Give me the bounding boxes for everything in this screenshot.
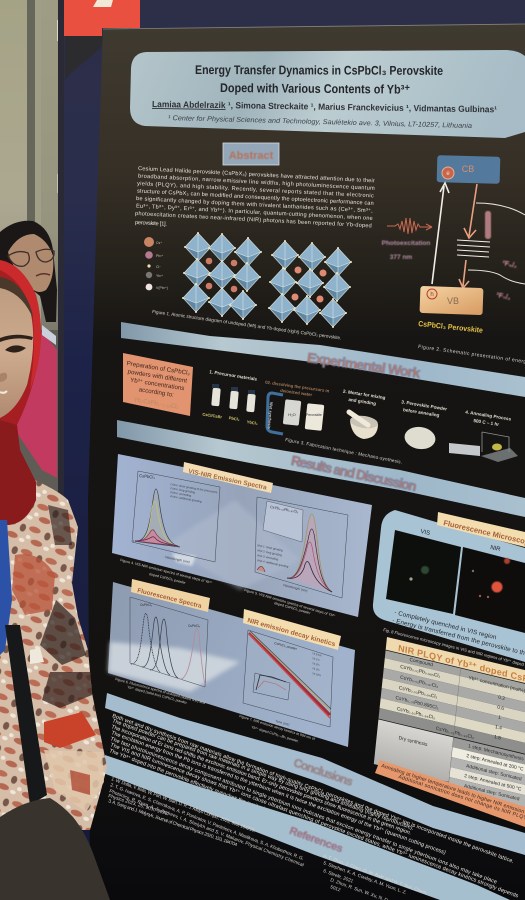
poster title — [195, 63, 443, 97]
preparation box: Preparation of CsPbCl₃ — [126, 360, 191, 377]
hair — [0, 221, 57, 322]
figure 8 caption: Fig. 8 Fluorescence microscopy images in VIS and NIR regions of Yb³⁺ doped — [383, 627, 525, 667]
collar — [42, 325, 56, 345]
references left: Photonics, R. Ryan, A. A. Andreev, I. A. Shelykh and S. V. Makarov, Physical Chemistry Chemical — [109, 788, 305, 867]
step: dissolving: Perovskite — [306, 413, 322, 417]
label: fluorescence spectra: Fluorescence Spectra — [137, 587, 203, 610]
figure 1 caption: Figure 1. Atomic structure diagram of undoped (left) and Yb-doped (right) CsPbCl₃ perovskite. — [152, 309, 342, 341]
table rows: CsYb₀.₁₀Pb₀.₈₅Cl₃ — [396, 706, 435, 721]
step 1: precursor materials: CsCl/CsBr — [202, 412, 223, 420]
label: NIR decay kinetics — [243, 609, 341, 650]
figure 7 caption: Figure 7. NIR emission decay kinetics at 984 nm of — [239, 714, 315, 741]
crystal legend: Yb³⁺ — [156, 274, 163, 278]
glasses — [8, 249, 54, 266]
step 4: annealing — [449, 409, 518, 462]
blouse print areas — [12, 505, 104, 812]
chart: figure 6: CsPbCl₃ — [188, 624, 201, 628]
lanyard — [0, 520, 12, 655]
chart: figure 4: 4 time: additional grinding — [170, 494, 202, 504]
panel: fluorescence microscopy: NIR — [490, 545, 502, 553]
step: dissolving — [265, 380, 330, 434]
references right: 6. Steele, 2021 — [323, 868, 354, 884]
crystal legend: Cl⁻ — [156, 265, 161, 269]
person in the background — [0, 221, 57, 478]
step 3: powder: before annealing — [403, 407, 440, 418]
step 1: precursor materials: YbCl₃ — [246, 419, 258, 426]
preparation box: according to: — [138, 386, 175, 399]
step 2: mortar: and grinding — [348, 397, 377, 406]
panel: fluorescence and decay — [108, 579, 355, 747]
micrograph: NIR — [455, 547, 525, 633]
step 4: annealing: 500 C – 1 hr — [473, 418, 500, 427]
crystal structure Yb-doped — [268, 240, 352, 328]
section banner: experimental work — [121, 322, 525, 397]
VB box: VB — [447, 296, 459, 306]
preparation box: powders with different — [127, 368, 188, 385]
preparation box: Yb₂CsPb₁₋₁.₅ₓCl₃ — [133, 397, 180, 411]
section banner: conclusions — [105, 693, 525, 855]
title banner — [130, 50, 525, 138]
chart: figure 4: Wavelength (nm) — [165, 555, 190, 564]
chart: figure 7: CsPbCl₃ powder — [274, 641, 298, 651]
nose — [0, 373, 7, 382]
chart: figure 5: step 4: additional grinding — [257, 558, 289, 569]
crystal legend: Pb²⁺ — [156, 254, 163, 258]
table rows: 1.8 — [494, 734, 501, 742]
figure 5 caption: doped CsPbCl₃ powder — [274, 601, 312, 615]
poster title: Energy Transfer Dynamics in CsPbCl₃ Perovskite — [195, 63, 443, 78]
figure 3 caption: Figure 3. Fabrication technique : Mechano-synthesis. — [285, 437, 403, 465]
figure 6 caption: Figure 6. Fluorescence spectra of undoped (dotted line) and — [115, 677, 206, 705]
conclusions text: The incorporation of Er ions red-shifts the excitonic emission band. Er-only perovskite powders show fluorescence in the green region. — [110, 724, 412, 837]
section banner: conclusions: Conclusions — [292, 756, 355, 789]
references right: 5012 — [330, 884, 342, 893]
chart: figure 4: CsPbCl₃ — [139, 473, 156, 480]
conclusions text: The excitation energy from the Pb ions is transferred to the ytterbium when it is twice the excitation energy of the Yb³⁺ (quantum cutting process) — [110, 730, 447, 856]
section banner: experimental work: Experimental Work — [306, 349, 421, 381]
step 4: annealing: 4. Annealing Process — [465, 409, 512, 422]
pink jacket — [12, 332, 57, 478]
table rows: 0.2 — [498, 695, 505, 702]
chart: figure 6: CsPbCl₃ — [140, 603, 153, 607]
abstract text: Cesium Lead Halide perovskite (CsPbX₃) perovskites have attracted attention due to their — [138, 166, 375, 184]
red sign — [64, 0, 140, 36]
abstract text — [135, 166, 375, 229]
CB box: e — [446, 171, 450, 177]
panel: fluorescence microscopy: VIS — [420, 529, 431, 537]
section banner: results and discussion — [117, 420, 525, 517]
chart: figure 4: 2 time: long grinding — [170, 486, 196, 494]
bag — [0, 798, 110, 900]
label: VIS-NIR: VIS-NIR Emission Spectra — [188, 468, 268, 492]
CB box: CB — [462, 164, 474, 174]
abstract text: yields (PLQY), and high stability. Recently, several reports stated that the electronic — [137, 181, 374, 199]
abstract text: structure of CsPbX₃ can be modified and consequently the optoelectronic performance can — [137, 189, 374, 207]
step 1: precursor materials — [202, 369, 258, 426]
crystal legend — [144, 237, 168, 290]
step 2: mortar: 2. Mortar for mixing — [343, 389, 386, 400]
abstract text: Eu³⁺, Tb³⁺, Dy³⁺, Er³⁺, and Yb³⁺). In particular, quantum-cutting phenomenon, when one — [136, 203, 373, 222]
excitation arrow — [432, 183, 449, 284]
energy diagram: ²F₇/₂ — [496, 292, 511, 302]
section banner: results and discussion: Results and Discussion — [290, 453, 418, 494]
chart: figure 7: Yb 3% — [312, 666, 321, 672]
table rows: Yb³⁺ concentration (mol%) — [468, 675, 525, 695]
table rows: 1.4 — [495, 724, 502, 732]
step: dissolving: deionized water — [280, 388, 313, 397]
emission paths — [468, 203, 525, 284]
chart: figure 7: Time (ms) — [275, 719, 290, 727]
chart: figure 5: step 1: short grinding — [257, 543, 284, 553]
micrograph: VIS — [386, 530, 461, 614]
references left: 3. A. Song and J. Melynyk, Journal of Chemical Physics 2020, 153, 184704 — [108, 798, 238, 847]
blouse — [0, 478, 107, 830]
table rows — [388, 655, 525, 803]
figure 7 caption: Yb³⁺ doped CsPb₁₋ₓBrₓ powder. — [251, 725, 299, 743]
references right: 5. Stephen, K. A. Cowley, A. M. Yoon, L. Z. — [323, 860, 408, 895]
bag strap — [5, 625, 47, 805]
chart: figure 7: Yb 0.5% — [312, 651, 323, 658]
label: fluorescence spectra — [131, 579, 210, 612]
figure 4 caption: Figure 4. VIS-NIR emission spectra of several steps of Yb³⁺ — [120, 558, 213, 585]
figure 6 caption: Yb³⁺ doped (solid line) CsPbCl₃ powder. — [127, 685, 188, 705]
photoexcitation wave: Photoexcitation — [382, 240, 430, 247]
chart: figure 5: step 2: long grinding — [257, 548, 283, 557]
microscopy findings: - Energy is transferred from the perovskite to the — [392, 617, 525, 658]
table rows: 1 — [498, 715, 501, 721]
figure 4 caption: doped CsPbCl₃ powder — [149, 572, 187, 585]
chart: figure 4: 3 time: annealing — [170, 490, 192, 498]
conclusions text: The VIS and NIR luminescence decay shows that Yb³⁺ ions cause ultrafast quenching of perovskite excited states, while Yb³⁺ luminescence decay kinetics strongly depends — [109, 742, 519, 900]
crystal structure undoped — [182, 232, 262, 320]
section banner: references: References — [288, 825, 344, 855]
table rows: Dry synthesis — [398, 735, 428, 748]
table: NIR PLQY — [373, 637, 525, 827]
step 2: mortar — [343, 389, 386, 439]
chart: figure 7 — [243, 630, 333, 727]
references left: Physics 2023, 25, 9030-9038. — [108, 793, 169, 816]
face — [8, 234, 53, 292]
step: dissolving: Wet synthesis — [267, 402, 274, 430]
table conclusion band: Additional sonication does not change its NIR PLQY — [397, 774, 525, 822]
references right: 4. T. Zhou, J. Chen, O. M. Bakr and H. T. Sun, Chem. — [323, 853, 428, 896]
energy levels — [457, 240, 490, 257]
scarf highlight — [0, 260, 41, 390]
step: dissolving: H₂O — [288, 412, 296, 417]
table rows: Compound — [409, 657, 434, 668]
chart: figure 5: Wavelength (nm) — [283, 583, 308, 593]
chart: figure 7: Yb 10% — [312, 671, 322, 677]
crystal legend: V(Pb²⁺) — [156, 286, 168, 290]
references left: 1. W. Dutta, V. Bala, W. Pan, W. Bian, D. R. J. Alloys Compd., 2022, 903, 164210. — [111, 776, 256, 833]
chart: figure 5 — [255, 497, 348, 598]
abstract text: photoexcitation creates two near-infrared (NIR) photons has been reported for Yb-doped — [135, 211, 372, 229]
label: VIS-NIR — [183, 462, 273, 493]
VB box: h — [430, 292, 434, 298]
table rows: CsYb₀.₀₃Pb₀.₉₅Cl₃ — [399, 685, 438, 700]
chart: figure 4 — [132, 471, 220, 564]
person in the foreground — [0, 260, 110, 900]
table rows: CsYb₀.₀₇Pb0.895Cl₃ — [395, 695, 439, 711]
authors: Lamiaa Abdelrazik ¹, Simona Streckaite ¹, Marius Franckevicius ¹, Vidmantas Gulbinas¹ — [152, 99, 497, 114]
table conclusion band: Annealing at higher temperature leads to higher NIR emission — [380, 763, 525, 815]
step 3: powder: 3. Perovskite Powder — [401, 399, 448, 412]
chart: figure 7: Yb 1% — [312, 656, 321, 662]
conclusions text: The Yb³⁺ doped into the perovskite effectively quenches the excitonic emission and enables quantum cutting with photoluminescence efficiency of over 100%. — [108, 748, 469, 889]
heading: abstract: Abstract — [229, 150, 274, 162]
affiliation: ¹ Center for Physical Sciences and Technology, Saulėtekio ave. 3, Vilnius, LT-10257, Lithuania — [168, 115, 472, 130]
table rows: Additional step: Sonicated — [464, 783, 520, 803]
chart: figure 7: Yb 2% — [312, 661, 321, 667]
preparation box — [123, 353, 193, 416]
conclusions text: The doped powder can be prepared from raw materials in a simple way by using only grinding and annealing (highly reproducible). — [111, 718, 415, 832]
microscopy findings: - Completely quenched in VIS region — [394, 609, 498, 641]
table rows: 0.6 — [497, 705, 504, 712]
table rows: Additional step: Sonicated — [466, 763, 522, 783]
panel: VIS-NIR emission spectra — [112, 454, 372, 617]
conclusions text: Both wet and dry synthesis from raw materials allow the formation of high-quality CsPbCl₃ perovskites and the doped Yb³⁺ ion is incorporated inside the perovskite lattice. — [111, 713, 515, 865]
chart: figure 5: step 3: annealing — [257, 553, 279, 562]
VB box — [420, 286, 483, 315]
abstract text: be significantly changed by doping them with trivalent lanthanides such as (Ce³⁺, Sm³⁺, — [136, 195, 373, 214]
step 3: powder — [401, 399, 448, 451]
relaxation arrows — [464, 184, 477, 238]
smile — [0, 391, 7, 393]
hair line — [0, 277, 33, 318]
table rows: 2 step: Annealed at 500 °C — [464, 773, 522, 793]
energy diagram — [382, 155, 525, 335]
step 1: precursor materials: PbCl₂ — [228, 415, 240, 422]
headscarf — [0, 260, 41, 525]
abstract text: broadband absorption, narrow emissive line widths, high photoluminescence quantum — [138, 174, 375, 192]
poster title: Doped with Various Contents of Yb³⁺ — [220, 81, 410, 97]
lower scarf — [0, 420, 36, 525]
table rows: CsYb₀.₀₂Pb₀.₉₇Cl₃ — [400, 675, 439, 690]
preparation box: Yb³⁺ concentrations — [130, 377, 185, 392]
references left: 2. T. G. Ivanova, E. S. Chernikova, A. P. Ponkratov, V. Panteleev, A. Maslikova, S. A. Khubezhov, R. G. — [110, 782, 305, 861]
section banner: references — [103, 755, 510, 900]
crystal legend: Cs⁺ — [156, 241, 162, 245]
transition labels: ²F₅/₂ — [502, 260, 518, 270]
face — [0, 288, 33, 418]
step 1: precursor materials: 1. Precursor materials — [209, 369, 258, 382]
conclusions text: The fast photoluminescence decay component attributed to single ytterbium ions indicates that exciton energy transfer to single ytterbium ions also may take place — [109, 736, 498, 885]
table rows: CsYb₀.₀₁Pb₀.₉₈₅Cl₃ — [400, 664, 441, 679]
perovskite label: CsPbCl₃ Perovskite — [418, 319, 483, 335]
CB box — [437, 155, 500, 184]
abstract text: perovskite [1]. — [135, 220, 168, 228]
chart: figure 4: 1 time: short grinding of the precursors — [170, 482, 218, 494]
table rows: 1 step: Mechanosynthesis — [468, 743, 524, 763]
step: dissolving: 02. dissolving the precursors in — [265, 380, 330, 394]
table rows: CsYb₀.₀₁Pb₀.₉₉Cl₃ — [436, 726, 474, 741]
chart: figure 6 — [130, 597, 208, 687]
heading: abstract — [223, 143, 279, 165]
label: NIR decay kinetics: NIR emission decay kinetics — [246, 617, 336, 648]
eyebrow and eye — [0, 335, 33, 353]
photoexcitation wave — [382, 218, 432, 261]
table stripes — [373, 637, 525, 812]
figure 5 caption: Figure 5. VIS-NIR emission spectra of several steps of Yb³⁺ — [244, 588, 336, 618]
photoexcitation wave: 377 nm — [390, 254, 412, 261]
mouth — [36, 274, 50, 276]
table rows: 2 step: Annealed at 200 °C — [466, 753, 524, 773]
panel: fluorescence microscopy — [373, 510, 525, 662]
chart: figure 5: CsYb₀.₀₂Pb₀.₉₇Cl₃ — [270, 505, 299, 514]
